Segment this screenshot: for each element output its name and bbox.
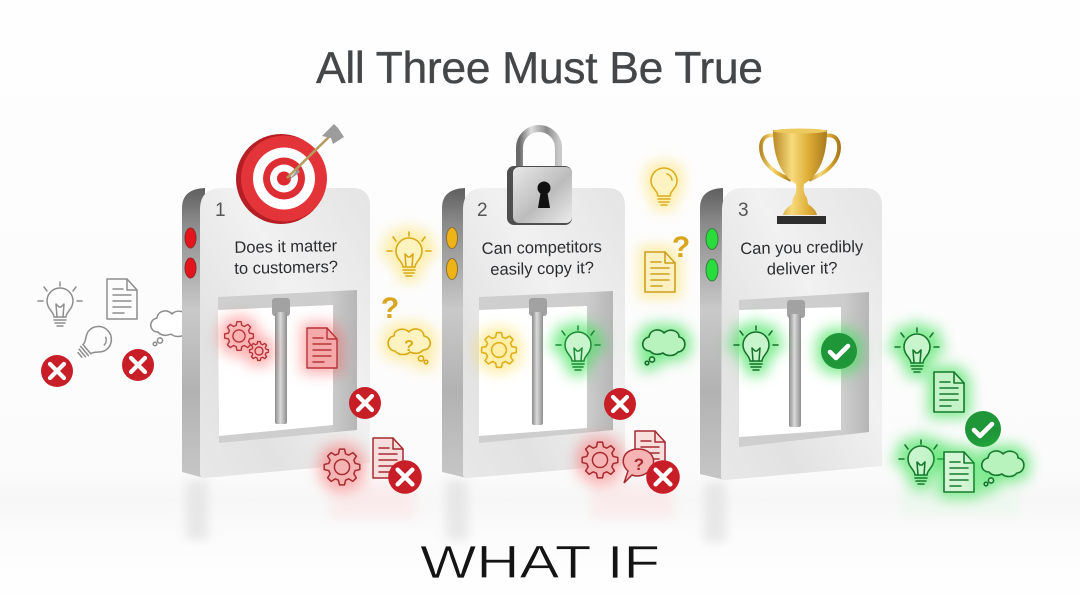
panel: gate 2 — [442, 188, 636, 478]
gate 2 question: Can competitors — [482, 238, 602, 258]
icon: red document — [373, 438, 403, 478]
gate 3 post — [787, 300, 805, 427]
icon: gray light bulb — [38, 282, 82, 326]
gate 3 question: Can you credibly — [740, 238, 864, 258]
icon: green bulb in gate 3 — [734, 326, 778, 370]
icon: yellow cloud with question: ? — [404, 338, 414, 355]
gate 1 rejected pile — [324, 438, 422, 494]
icon: green bulb — [895, 328, 939, 372]
yellow ideas between gates 1 and 2 — [381, 232, 431, 364]
panel: gate 3 — [700, 188, 882, 480]
icon: red gears in gate 1 — [225, 322, 268, 360]
green ideas after gate 3 — [895, 328, 1024, 492]
icon: reject badge — [646, 460, 680, 494]
icon: red document — [635, 431, 665, 471]
icon: reject badge gate 1 — [349, 387, 381, 419]
icon: yellow bulb no rays — [651, 168, 677, 205]
gate 1 number: 1 — [215, 200, 226, 221]
icon: gold trophy — [761, 128, 839, 224]
gate 1 indicator lights — [185, 228, 196, 278]
icon: padlock — [507, 128, 572, 225]
gate 1 post — [272, 298, 290, 424]
gate 2 rejected pile — [582, 431, 680, 494]
icon: green cloud lower — [982, 451, 1024, 486]
icon: red document in gate 1 — [307, 328, 337, 368]
icon: green document lower — [944, 452, 974, 492]
logo: WHAT IF: WHAT IF — [420, 536, 660, 588]
panel: gate 1 — [182, 188, 381, 478]
icon: red gear — [324, 449, 360, 485]
gate 2 indicator lights — [446, 228, 458, 280]
gate 3 indicator lights — [706, 228, 718, 281]
gate 3 number: 3 — [738, 200, 749, 221]
icon: red gear — [582, 442, 618, 478]
floor reflections — [186, 480, 1020, 542]
gate 2 question: easily copy it? — [490, 259, 594, 279]
gate 2 post — [529, 298, 547, 425]
icon: gray document — [107, 279, 137, 319]
icon: gray thought cloud — [151, 311, 193, 346]
icon: target with arrow — [236, 124, 344, 224]
gate 1 question: Does it matter — [234, 237, 338, 257]
icon: green bulb lower — [899, 440, 943, 484]
icon: green document — [934, 372, 964, 412]
icon: yellow document — [645, 252, 675, 292]
icon: red question bubble: ? — [634, 455, 644, 474]
icon: yellow question mark: ? — [672, 231, 690, 264]
icon: yellow bulb — [387, 232, 431, 276]
icon: check badge in gate 3 — [821, 333, 857, 369]
gate 2 number: 2 — [477, 200, 488, 221]
gray rejected ideas at left — [38, 279, 193, 387]
icon: reject badge left — [41, 355, 73, 387]
ideas between gates 2 and 3 — [643, 168, 690, 365]
icon: question mark: ? — [381, 292, 399, 325]
gate 1 question: to customers? — [234, 258, 338, 278]
title: All Three Must Be True — [316, 44, 763, 93]
icon: reject badge — [388, 460, 422, 494]
icon: green bulb in gate 2 — [556, 326, 600, 370]
icon: reject badge right — [122, 349, 154, 381]
icon: check badge — [965, 411, 1001, 447]
icon: tilted gray bulb — [72, 321, 117, 365]
icon: reject badge gate 2 — [604, 388, 636, 420]
gate 3 question: deliver it? — [767, 259, 838, 279]
icon: yellow gear in gate 2 — [482, 333, 516, 367]
icon: green cloud — [643, 330, 685, 365]
